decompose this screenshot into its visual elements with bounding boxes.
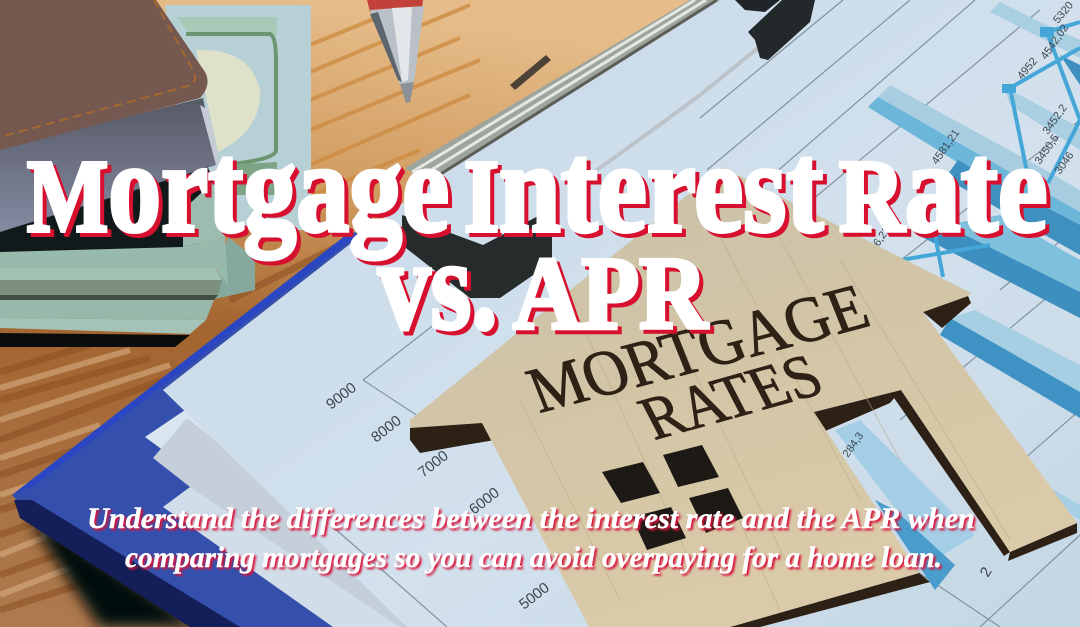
chart value labels: 5320 <box>1051 0 1076 26</box>
wallet <box>0 0 222 232</box>
axis labels <box>323 379 996 613</box>
chart value labels: 4581,21 <box>930 127 962 167</box>
axis labels: 5000 <box>516 579 553 613</box>
chart value labels: 4952 <box>1015 55 1040 82</box>
clipboard clip <box>402 0 815 298</box>
grid lines <box>333 0 1080 627</box>
chart value labels: 284,3 <box>841 430 866 460</box>
line chart on paper <box>883 22 1080 277</box>
axis labels: 8000 <box>368 412 405 446</box>
pen <box>367 0 424 103</box>
banknote on table <box>165 5 311 230</box>
axis labels: 2 <box>977 564 996 580</box>
blue folder <box>12 232 470 627</box>
title: APR <box>513 235 709 351</box>
chart value labels <box>841 0 1077 460</box>
wood grain <box>520 200 1010 610</box>
axis labels: 7000 <box>415 447 452 481</box>
subtitle: comparing mortgages so you can avoid overpaying for a home loan. <box>125 541 942 574</box>
loose sheets <box>145 410 407 627</box>
title: Rate <box>839 118 1047 260</box>
engraved words: RATES <box>628 341 834 452</box>
title: vs. <box>378 215 498 356</box>
house face <box>410 167 1077 627</box>
chart value labels: 3450,5 <box>1033 132 1062 167</box>
chart value labels: 4542,02 <box>1039 22 1071 62</box>
title <box>27 117 1047 356</box>
house edge thickness <box>410 296 1077 627</box>
title: Interest <box>464 117 823 259</box>
window panes <box>602 445 743 550</box>
axis labels: 6000 <box>466 484 503 518</box>
wooden house cut-out <box>410 167 1077 627</box>
chart value labels: 3452,2 <box>1041 102 1070 137</box>
engraved words: MORTGAGE <box>518 271 879 427</box>
title: Mortgage <box>27 118 449 259</box>
stack of money <box>0 165 255 347</box>
chart value labels: 3046 <box>1053 150 1077 177</box>
subtitle: Understand the differences between the interest rate and the APR when <box>87 502 975 535</box>
axis labels: 9000 <box>323 379 360 413</box>
chart value labels: 4546,23 <box>861 224 893 264</box>
subtitle <box>87 502 975 574</box>
bar chart on paper <box>835 2 1080 590</box>
